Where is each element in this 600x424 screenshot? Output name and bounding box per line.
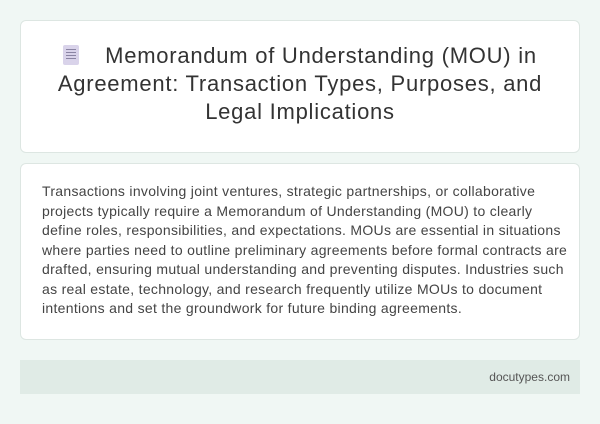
footer text: docutypes.com bbox=[489, 370, 570, 384]
panel: description bbox=[20, 163, 580, 340]
footer bbox=[20, 360, 580, 394]
panel: title card bbox=[20, 20, 580, 153]
text block: Transactions involving joint ventures, strategic partnerships, or collaborative projects typically require a Memorandum of Understanding (MOU) to clearly define roles, responsibilities, and expectations. MOUs are essential in situations where parties need to outline preliminary agreements before formal contracts are drafted, ensuring mutual understanding and preventing disputes. Industries such as real estate, technology, and research frequently utilize MOUs to document intentions and set the groundwork for future binding agreements. bbox=[42, 183, 567, 316]
icon: document bbox=[63, 45, 79, 65]
title: Memorandum of Understanding (MOU) in Agreement: Transaction Types, Purposes, and Legal Implications bbox=[58, 43, 542, 124]
